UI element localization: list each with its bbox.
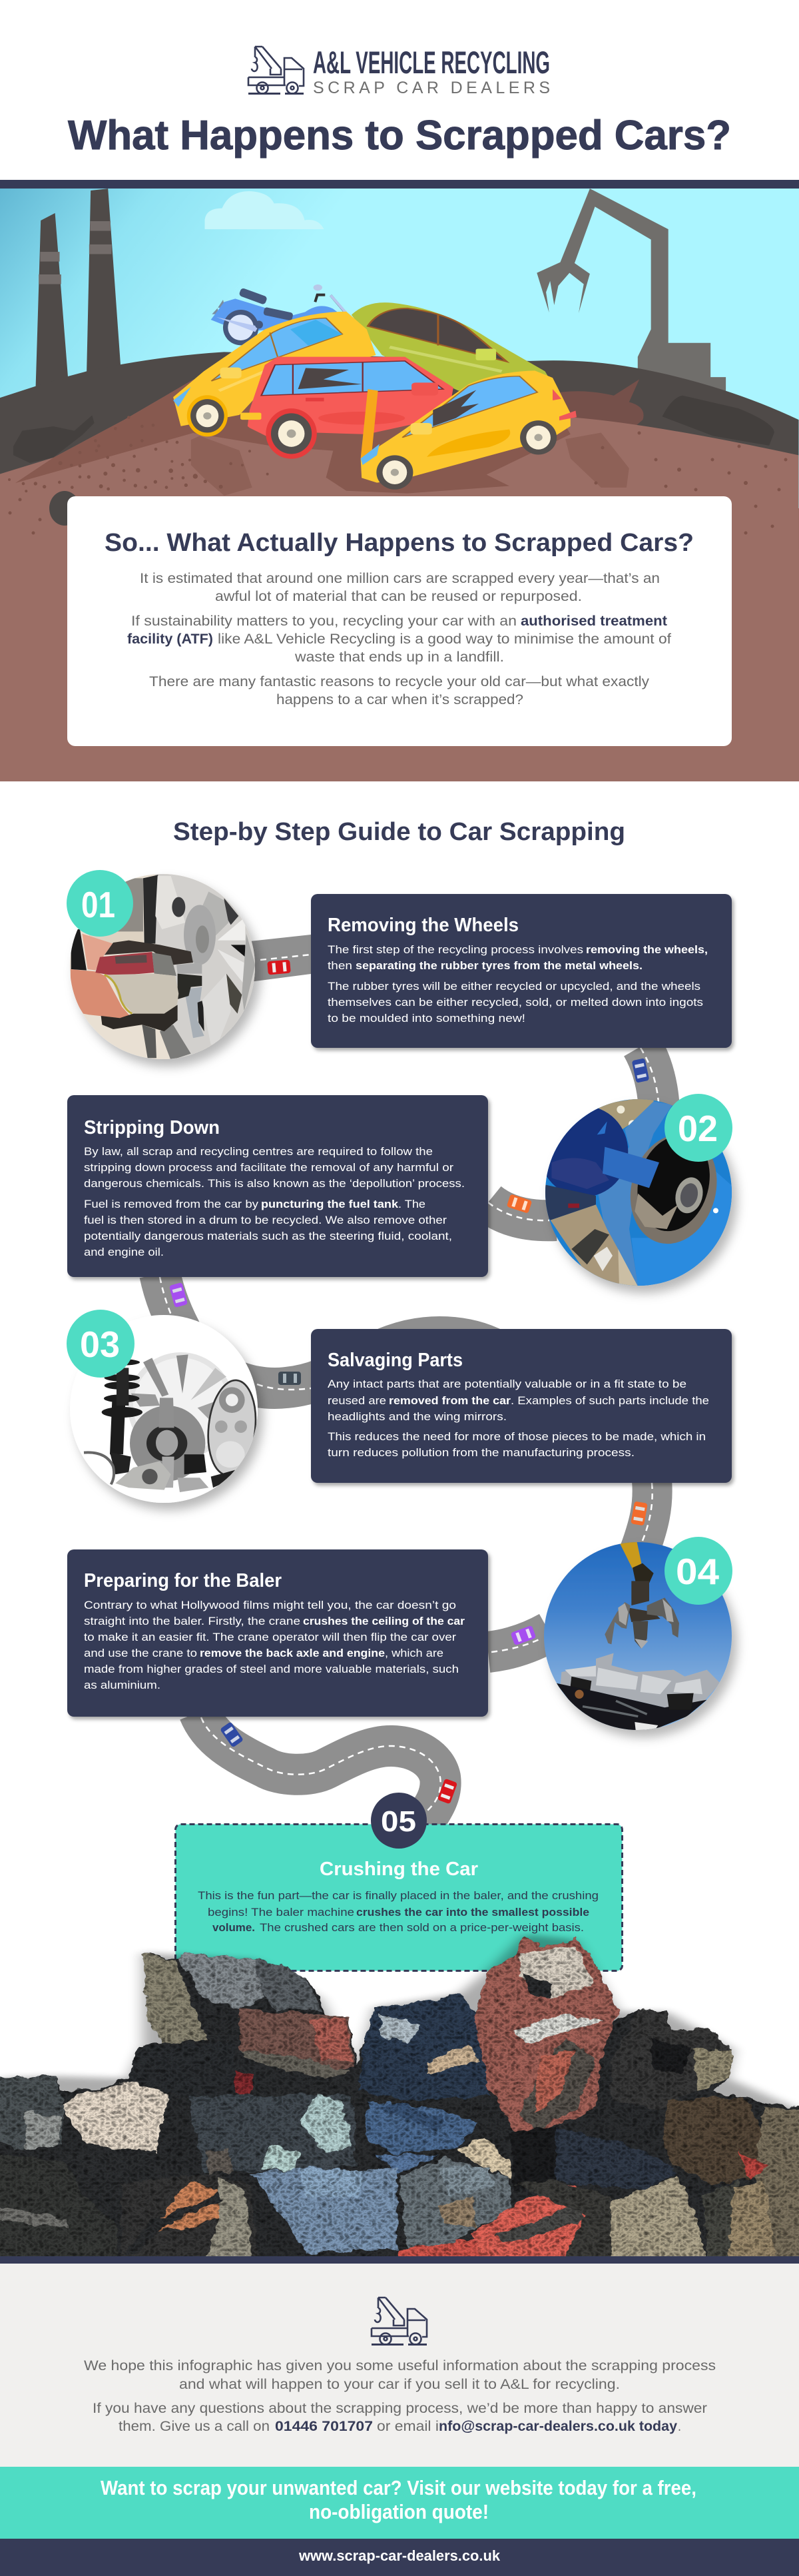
badge 05: 05 [381,1805,416,1838]
closing text: 01446 701707 [275,2419,373,2434]
panel: step 4 preparing for the baler [67,1549,488,1717]
badge 05 [371,1793,427,1849]
step 3 text: This reduces the need for more of those pieces to be made, which in [328,1430,706,1443]
step 3 heading: Salvaging Parts [328,1350,463,1371]
step 2 text: and engine oil. [84,1246,164,1258]
road segment 8 [199,1712,441,1829]
step 4 text [84,1599,465,1691]
car: blue [632,1058,649,1083]
step 1 text: The rubber tyres will be either recycled or upcycled, and the wheels [328,980,700,993]
step 2 text: potentially dangerous materials such as the steering fluid, coolant, [84,1230,452,1242]
step 5 text: crushes the car into the smallest possible [356,1906,589,1919]
panel: closing message [0,2264,799,2467]
badge 03: 03 [80,1324,120,1365]
call to action text [101,2476,696,2523]
closing text: We hope this infographic has given you some useful information about the scrapping process [84,2358,716,2373]
icon: tow truck logo [248,47,304,93]
intro text: awful lot of material that can be reused or repurposed. [215,589,582,604]
closing text: If you have any questions about the scrapping process, we’d be more than happy to answer [93,2401,707,2416]
step 3 text [328,1378,709,1459]
badge 04 [665,1537,732,1605]
badge 02 [665,1094,732,1162]
badge 02: 02 [678,1108,718,1149]
step 2 photo: fuel tank [539,1096,736,1289]
step 2 text: . The [398,1198,425,1210]
road segment 3 [488,1202,556,1220]
step 5 text: begins! The baler machine [208,1906,354,1919]
step 4 text: as aluminium. [84,1679,160,1691]
step 1 heading: Removing the Wheels [328,915,519,936]
step 2 text: stripping down process and facilitate the removal of any harmful or [84,1161,453,1174]
step 4 text: crushes the ceiling of the car [303,1615,465,1627]
step 1 text: removing the wheels, [586,943,708,956]
intro text: authorised treatment [521,614,667,629]
silhouette and ground dots [8,415,269,492]
closing text [84,2358,716,2434]
website url: www.scrap-car-dealers.co.uk [298,2547,501,2564]
right yellow car [361,370,577,490]
badge 03 [67,1310,134,1378]
crane with claw [537,189,726,420]
closing text: them. Give us a call on [119,2419,270,2434]
logo [248,45,550,97]
left yellow car [173,312,376,436]
step 5 text: This is the fun part—the car is finally placed in the baler, and the crushing [198,1889,599,1902]
badge 04: 04 [676,1551,719,1592]
car: red [267,960,291,975]
intro text: facility (ATF) [127,632,213,647]
step 2 text: fuel is then stored in a drum to be recycled. We also remove other [84,1214,447,1226]
step 4 heading: Preparing for the Baler [84,1570,282,1591]
logo name: A&L VEHICLE RECYCLING [313,45,550,80]
title: What Happens to Scrapped Cars? [68,113,731,159]
panel: intro card [67,496,732,746]
step 3 photo: car parts [70,1315,260,1503]
dirt mound [0,380,799,549]
step 1 text: separating the rubber tyres from the metal wheels. [356,959,643,972]
intro text [127,571,671,707]
road segment 7 [488,1632,549,1652]
step 4 photo: crane over scrap [539,1539,736,1735]
panel: step 3 salvaging parts [311,1329,732,1483]
closing text: . [678,2419,681,2434]
car: orange 2 [631,1502,648,1525]
step 4 text: , which are [385,1647,443,1659]
road segment 5 [183,1332,526,1388]
ground dots right [8,432,787,534]
step 1 text: themselves can be either recycled, sold, or melted down into ingots [328,996,703,1009]
road segment 6 [638,1480,653,1555]
road segment 2 [642,1046,659,1109]
step 3 text: removed from the car [389,1394,511,1407]
logo tagline: SCRAP CAR DEALERS [313,79,550,97]
step 2 heading: Stripping Down [84,1117,220,1138]
step 2 text: By law, all scrap and recycling centres are required to follow the [84,1145,433,1158]
step 3 text: reused are [328,1394,386,1407]
green car [352,302,553,390]
step 3 text: turn reduces pollution from the manufacturing process. [328,1446,635,1459]
road segment 1 [250,935,311,982]
step 3 text: Any intact parts that are potentially valuable or in a fit state to be [328,1378,686,1390]
scrap car silhouette right [662,396,774,446]
winding road [160,935,659,1829]
call to action text: Want to scrap your unwanted car? Visit our website today for a free, [101,2476,696,2499]
closing text: and what will happen to your car if you sell it to A&L for recycling. [179,2377,620,2392]
step 1 text [328,943,708,1025]
step 1 text: to be moulded into something new! [328,1012,525,1025]
call to action text: no-obligation quote! [309,2500,489,2523]
step 2 text: Fuel is removed from the car by [84,1198,259,1210]
step 5 text: volume. [212,1921,255,1934]
car: dark [278,1372,301,1385]
panel: step 2 stripping down [67,1095,488,1277]
closing text: nfo@scrap-car-dealers.co.uk today [439,2419,677,2434]
step 5 heading: Crushing the Car [320,1859,478,1880]
step 4 text: straight into the baler. Firstly, the crane [84,1615,300,1627]
tyre peeking behind card [49,491,80,526]
shadow on dirt [15,380,571,494]
intro text: happens to a car when it’s scrapped? [276,692,523,707]
step 3 text: . Examples of such parts include the [511,1394,709,1407]
panel: step 5 crushing the car [176,1824,622,1970]
car: blue 2 [220,1721,244,1748]
intro text: waste that ends up in a landfill. [294,649,504,665]
motorbike shadow [191,432,629,496]
intro heading: So... What Actually Happens to Scrapped Cars? [105,529,694,557]
brown scrap car silhouette [561,380,644,430]
panel: website footer [0,2539,799,2576]
step 1 photo: wheel removal [67,869,260,1063]
step 1 text: The first step of the recycling process involves [328,943,583,956]
step 2 text: dangerous chemicals. This is also known as the ‘depollution’ process. [84,1177,465,1190]
panel: step 1 removing the wheels [311,894,732,1048]
step 5 text: The crushed cars are then sold on a price-per-weight basis. [260,1921,584,1934]
footer band [0,2256,799,2264]
intro text: If sustainability matters to you, recycling your car with an [131,614,517,629]
intro text: like A&L Vehicle Recycling is a good way to minimise the amount of [218,632,671,647]
hero illustration: scrapyard [0,189,799,781]
road segment 4 [160,1274,185,1339]
badge 01: 01 [81,884,115,925]
step 4 text: made from higher grades of steel and more valuable materials, such [84,1663,459,1675]
dark hill [0,352,799,549]
header band [0,180,799,189]
step 2 text [84,1145,465,1258]
icon: tow truck [372,2298,427,2345]
step 4 text: Contrary to what Hollywood films might tell you, the car doesn’t go [84,1599,456,1611]
step 3 text: headlights and the wing mirrors. [328,1410,507,1423]
step 4 text: remove the back axle and engine [200,1647,385,1659]
panel: call to action [0,2467,799,2539]
car: red 2 [437,1779,457,1804]
red car [240,357,453,459]
step 5 text [198,1889,599,1934]
section heading: Step-by Step Guide to Car Scrapping [173,818,625,846]
intro text: It is estimated that around one million cars are scrapped every year—that’s an [140,571,660,586]
car: purple 2 [511,1625,536,1645]
car: purple [169,1282,188,1308]
step 4 text: to make it an easier fit. The crane operator will then flip the car over [84,1631,456,1643]
crushed car heap [0,1934,799,2265]
badges [67,870,732,1849]
badge 01 [67,870,133,937]
step 4 text: and use the crane to [84,1647,197,1659]
motorbike [211,284,346,345]
cloud [205,191,324,229]
intro text: There are many fantastic reasons to recycle your old car—but what exactly [149,674,650,689]
step 1 text: then [328,959,352,972]
cars on the road [169,960,649,1804]
closing text: or email i [377,2419,439,2434]
chimneys [36,189,121,388]
step 2 text: puncturing the fuel tank [261,1198,399,1210]
car: orange [507,1194,532,1214]
